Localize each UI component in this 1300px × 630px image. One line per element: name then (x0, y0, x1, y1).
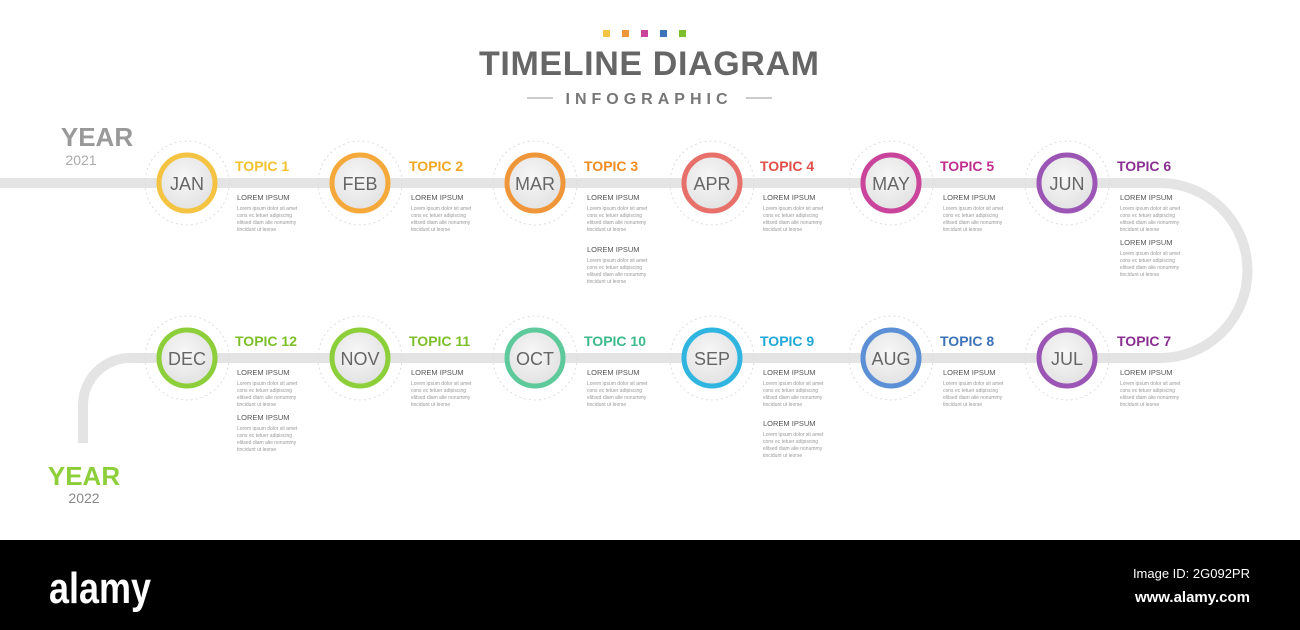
milestone: JUL: TOPIC 7 (1117, 333, 1171, 349)
milestone: JUN: TOPIC 6 (1117, 158, 1171, 174)
year 2021 label: 2021 (65, 152, 97, 168)
milestone: APR: APR (693, 174, 731, 194)
footer bar (0, 540, 1300, 630)
year 2022 label: YEAR (48, 461, 120, 491)
milestone: JAN (145, 141, 298, 233)
milestone: JAN: TOPIC 1 (235, 158, 289, 174)
milestone: NOV (318, 316, 472, 408)
milestone: MAR (493, 141, 648, 285)
milestone: FEB (318, 141, 472, 233)
milestone: DEC (145, 316, 298, 453)
milestone: OCT: OCT (516, 349, 554, 369)
year 2022 label (48, 461, 120, 506)
title: INFOGRAPHIC (566, 91, 732, 108)
milestone: MAY: TOPIC 5 (940, 158, 994, 174)
milestone: JUN (1025, 141, 1181, 278)
footer bar: www.alamy.com (1134, 589, 1250, 606)
milestone: APR: TOPIC 4 (760, 158, 814, 174)
milestone: JUL: JUL (1051, 349, 1083, 369)
title: TIMELINE DIAGRAM (479, 45, 819, 83)
year 2022 label: 2022 (68, 490, 100, 506)
milestone: FEB: TOPIC 2 (409, 158, 463, 174)
year 2021 label (61, 122, 133, 168)
milestone: FEB: FEB (342, 174, 378, 194)
milestone: MAR: MAR (515, 174, 555, 194)
milestone: SEP (670, 316, 824, 459)
year 2021 label: YEAR (61, 122, 133, 152)
milestone: MAY (849, 141, 1004, 233)
milestone: JUN: JUN (1050, 174, 1084, 194)
milestone: JUL (1025, 316, 1181, 408)
milestone: NOV: NOV (340, 349, 380, 369)
milestone: SEP: SEP (694, 349, 730, 369)
milestone: MAY: MAY (872, 174, 910, 194)
milestone: AUG (849, 316, 1004, 408)
milestone: APR (670, 141, 824, 233)
milestone: OCT: TOPIC 10 (584, 333, 646, 349)
milestone: NOV: TOPIC 11 (409, 333, 470, 349)
milestone: AUG: AUG (871, 349, 911, 369)
footer bar: Image ID: 2G092PR (1133, 566, 1250, 581)
milestone: MAR: TOPIC 3 (584, 158, 638, 174)
milestone: JAN: JAN (170, 174, 204, 194)
milestone: SEP: TOPIC 9 (760, 333, 814, 349)
milestone: DEC: DEC (168, 349, 206, 369)
footer bar: alamy (49, 564, 151, 613)
timeline track (0, 183, 1248, 443)
milestone: OCT (493, 316, 648, 408)
milestone: AUG: TOPIC 8 (940, 333, 994, 349)
title (479, 30, 819, 108)
milestone: DEC: TOPIC 12 (235, 333, 297, 349)
